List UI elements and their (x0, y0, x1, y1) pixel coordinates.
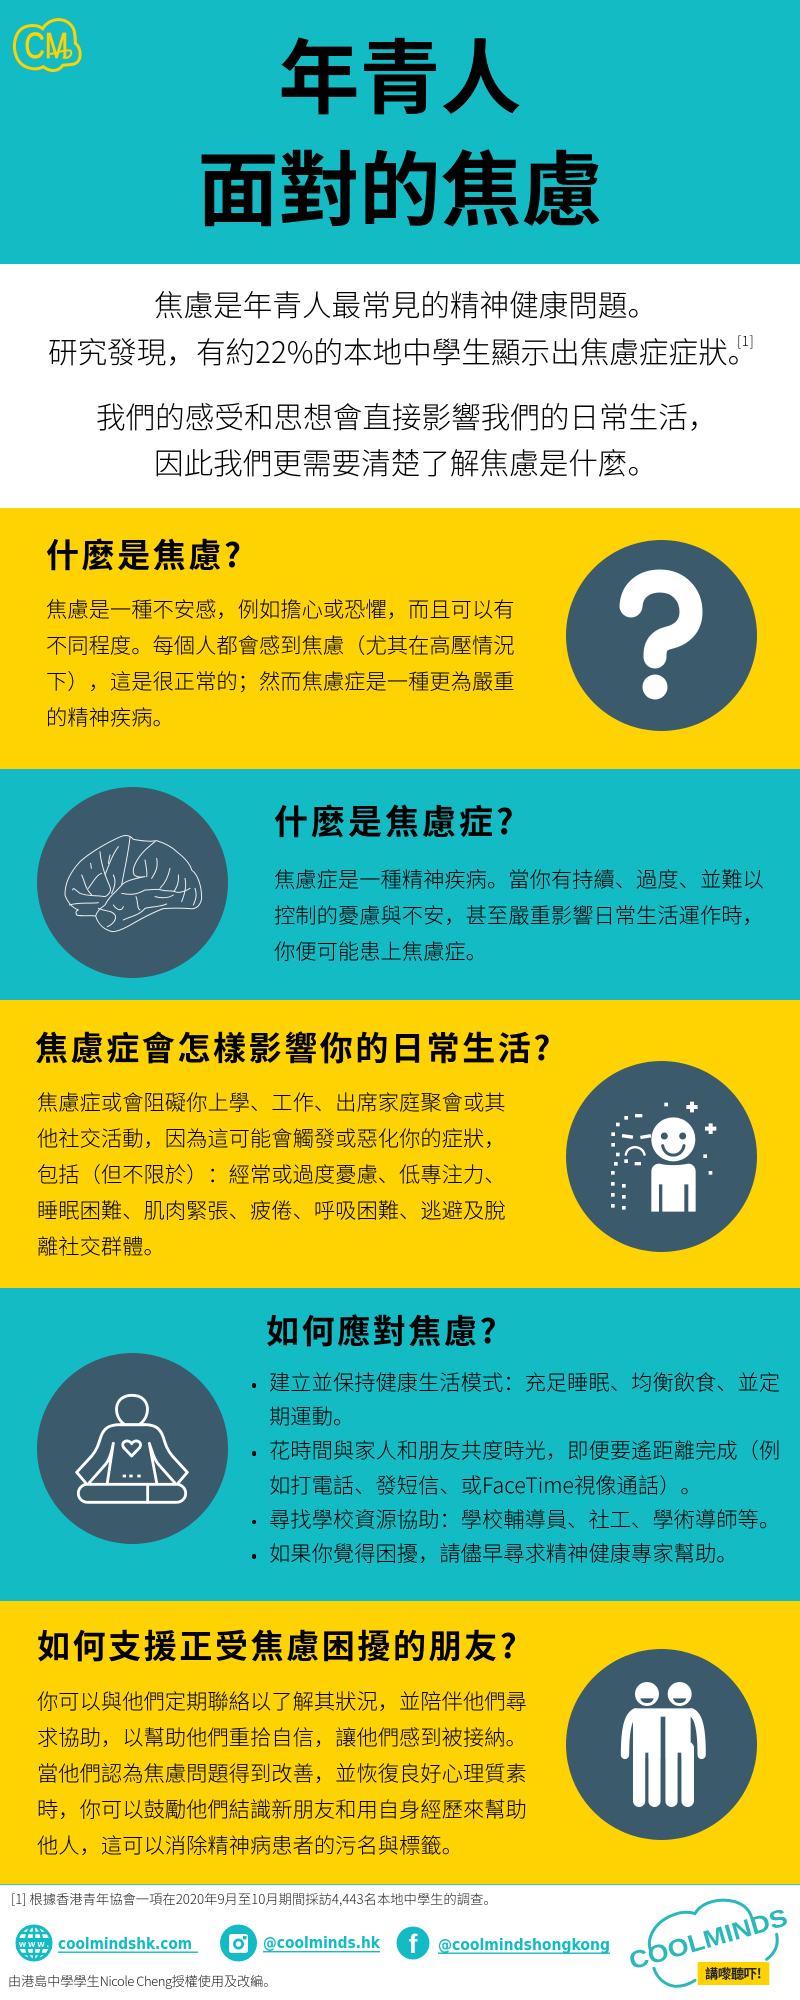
text block: 求協助，以幫助他們重拾自信，讓他們感到被接納。 (37, 1721, 527, 1752)
footnote: [1] 根據香港青年協會一項在2020年9月至10月期間採訪4,443名本地中學生的調查。 (11, 1889, 497, 1908)
panel: supporting friends (0, 1601, 800, 1884)
text block: 下），這是很正常的；然而焦慮症是一種更為嚴重 (46, 665, 515, 696)
icon: instagram (220, 1924, 257, 1962)
text block: intro explanation (96, 394, 717, 483)
panel: what is anxiety (0, 508, 800, 769)
title (197, 14, 602, 242)
heading: 什麼是焦慮? (46, 529, 244, 577)
text block: 你可以與他們定期聯絡以了解其狀況，並陪伴他們尋 (37, 1685, 527, 1716)
icon: meditating figure (37, 1353, 228, 1544)
icon: facebook: f (408, 1929, 418, 1959)
heading: 什麼是焦慮症? (274, 795, 516, 844)
text block (37, 1086, 506, 1261)
text block: 他社交活動，因為這可能會觸發或惡化你的症狀， (37, 1122, 506, 1153)
logo: Coolminds: COOLMINDS (626, 1904, 791, 1975)
bullet: school resources: 尋找學校資源協助：學校輔導員、社工、學術導師等。 (269, 1503, 780, 1534)
text block: intro explanation: 因此我們更需要清楚了解焦慮是什麼。 (154, 440, 657, 483)
text block: 睡眠困難、肌肉緊張、疲倦、呼吸困難、逃避及脫 (37, 1194, 506, 1225)
text block: intro statistic: 焦慮是年青人最常見的精神健康問題。 (154, 282, 657, 325)
social links (16, 1924, 610, 1962)
panel: coping with anxiety (0, 1288, 800, 1601)
logo: Coolminds (626, 1898, 791, 1988)
icon: CM logo (12, 18, 82, 72)
icon: CM logo: CM (24, 25, 68, 66)
bullet: healthy lifestyle (269, 1365, 780, 1433)
panel: what is anxiety disorder (0, 769, 800, 1000)
bullet list (252, 1366, 780, 1568)
text block: 你便可能患上焦慮症。 (274, 935, 487, 966)
logo: Coolminds: 講嚟聽吓! (705, 1964, 762, 1983)
text block: 當他們認為焦慮問題得到改善，並恢復良好心理質素 (37, 1757, 527, 1788)
text block (37, 1685, 527, 1860)
title: 面對的焦慮 (197, 126, 602, 242)
bullet: professional help: 如果你覺得困擾，請儘早尋求精神健康專家幫助。 (269, 1537, 738, 1568)
bullet: time with family (269, 1433, 780, 1502)
icon: website globe (16, 1926, 52, 1960)
link: instagram: @coolminds.hk (263, 1933, 380, 1952)
icon: brain (37, 787, 228, 978)
icon: question mark (566, 540, 757, 731)
text block: 控制的憂慮與不安，甚至嚴重影響日常生活運作時， (274, 899, 764, 930)
link: website: coolmindshk.com (58, 1934, 192, 1953)
text block: intro explanation: 我們的感受和思想會直接影響我們的日常生活， (96, 394, 717, 437)
text block: 的精神疾病。 (46, 701, 174, 732)
heading: 如何應對焦慮? (266, 1305, 499, 1353)
bullet: healthy lifestyle: 建立並保持健康生活模式：充足睡眠、均衡飲食、並定 (269, 1366, 780, 1397)
bullet: time with family: 如打電話、發短信、或FaceTime視像通話）。 (269, 1469, 702, 1500)
bullet: time with family: 花時間與家人和朋友共度時光，即便要遙距離完成（例 (269, 1434, 780, 1465)
icon: smiling person with shadow self (566, 1061, 757, 1252)
title: 年青人 (278, 14, 522, 131)
heading: 焦慮症會怎樣影響你的日常生活? (35, 1022, 553, 1070)
text block: 他人，這可以消除精神病患者的污名與標籤。 (37, 1829, 463, 1860)
panel: impact on daily life (0, 1000, 800, 1288)
text block: intro statistic (48, 282, 757, 372)
text block: 焦慮症是一種精神疾病。當你有持續、過度、並難以 (274, 863, 764, 894)
panel: header (0, 0, 800, 264)
text block: intro statistic: [1] (737, 330, 754, 350)
icon: website globe: www. (18, 1939, 49, 1949)
icon: two friends (566, 1649, 757, 1840)
panel: introduction (0, 264, 800, 508)
panel: footer (0, 1884, 800, 2000)
text block: 焦慮是一種不安感，例如擔心或恐懼，而且可以有 (46, 593, 515, 624)
text block (46, 593, 515, 732)
credit line: 由港島中學學生Nicole Cheng授權使用及改編。 (8, 1971, 276, 1990)
text block: 焦慮症或會阻礙你上學、工作、出席家庭聚會或其 (37, 1086, 506, 1117)
text block: intro statistic: 研究發現，有約22%的本地中學生顯示出焦慮症症狀。 (48, 329, 757, 372)
text block: 包括（但不限於）：經常或過度憂慮、低專注力、 (37, 1158, 506, 1189)
bullet: healthy lifestyle: 期運動。 (269, 1400, 354, 1431)
icon: facebook (396, 1926, 430, 1960)
text block: 時，你可以鼓勵他們結識新朋友和用自身經歷來幫助 (37, 1793, 527, 1824)
text block: 不同程度。每個人都會感到焦慮（尤其在高壓情況 (46, 629, 515, 660)
text block (274, 863, 764, 966)
heading: 如何支援正受焦慮困擾的朋友? (37, 1620, 519, 1668)
text block: 離社交群體。 (37, 1230, 165, 1261)
